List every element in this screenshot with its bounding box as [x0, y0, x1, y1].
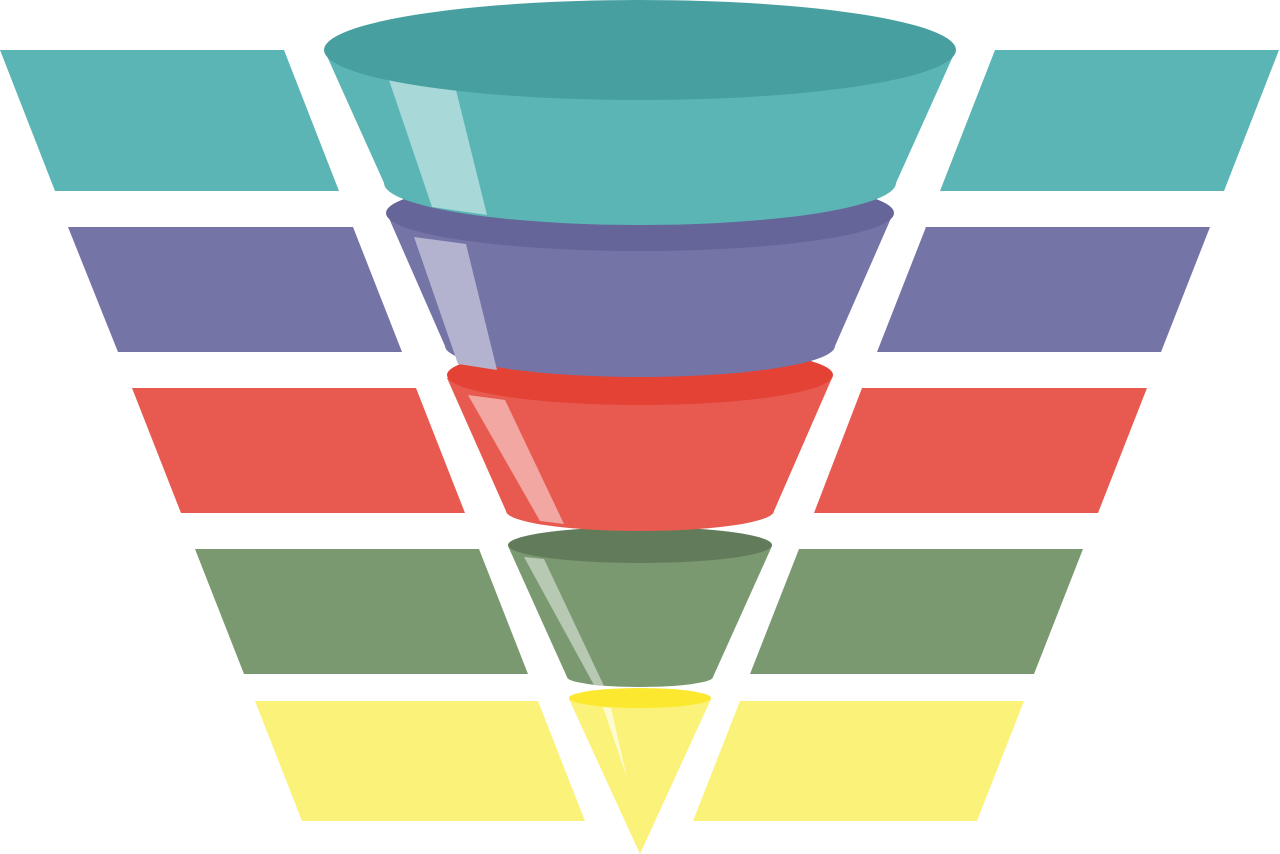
funnel segment 5 yellow [569, 688, 711, 854]
band: left yellow [255, 701, 585, 821]
band: right purple [877, 227, 1210, 352]
band: right green [750, 549, 1083, 674]
band: right red [814, 388, 1147, 513]
band: left green [195, 549, 528, 674]
funnel segment 3 red [447, 345, 833, 531]
band: right teal [940, 50, 1279, 191]
band: left red [132, 388, 465, 513]
left bands [0, 50, 585, 821]
funnel segment 1 teal [324, 0, 956, 225]
band: left purple [68, 227, 402, 352]
band: right yellow [693, 701, 1024, 821]
funnel segment 2 purple [386, 175, 894, 377]
band: left teal [0, 50, 339, 191]
funnel segment 4 green [508, 527, 772, 687]
right bands [693, 50, 1279, 821]
